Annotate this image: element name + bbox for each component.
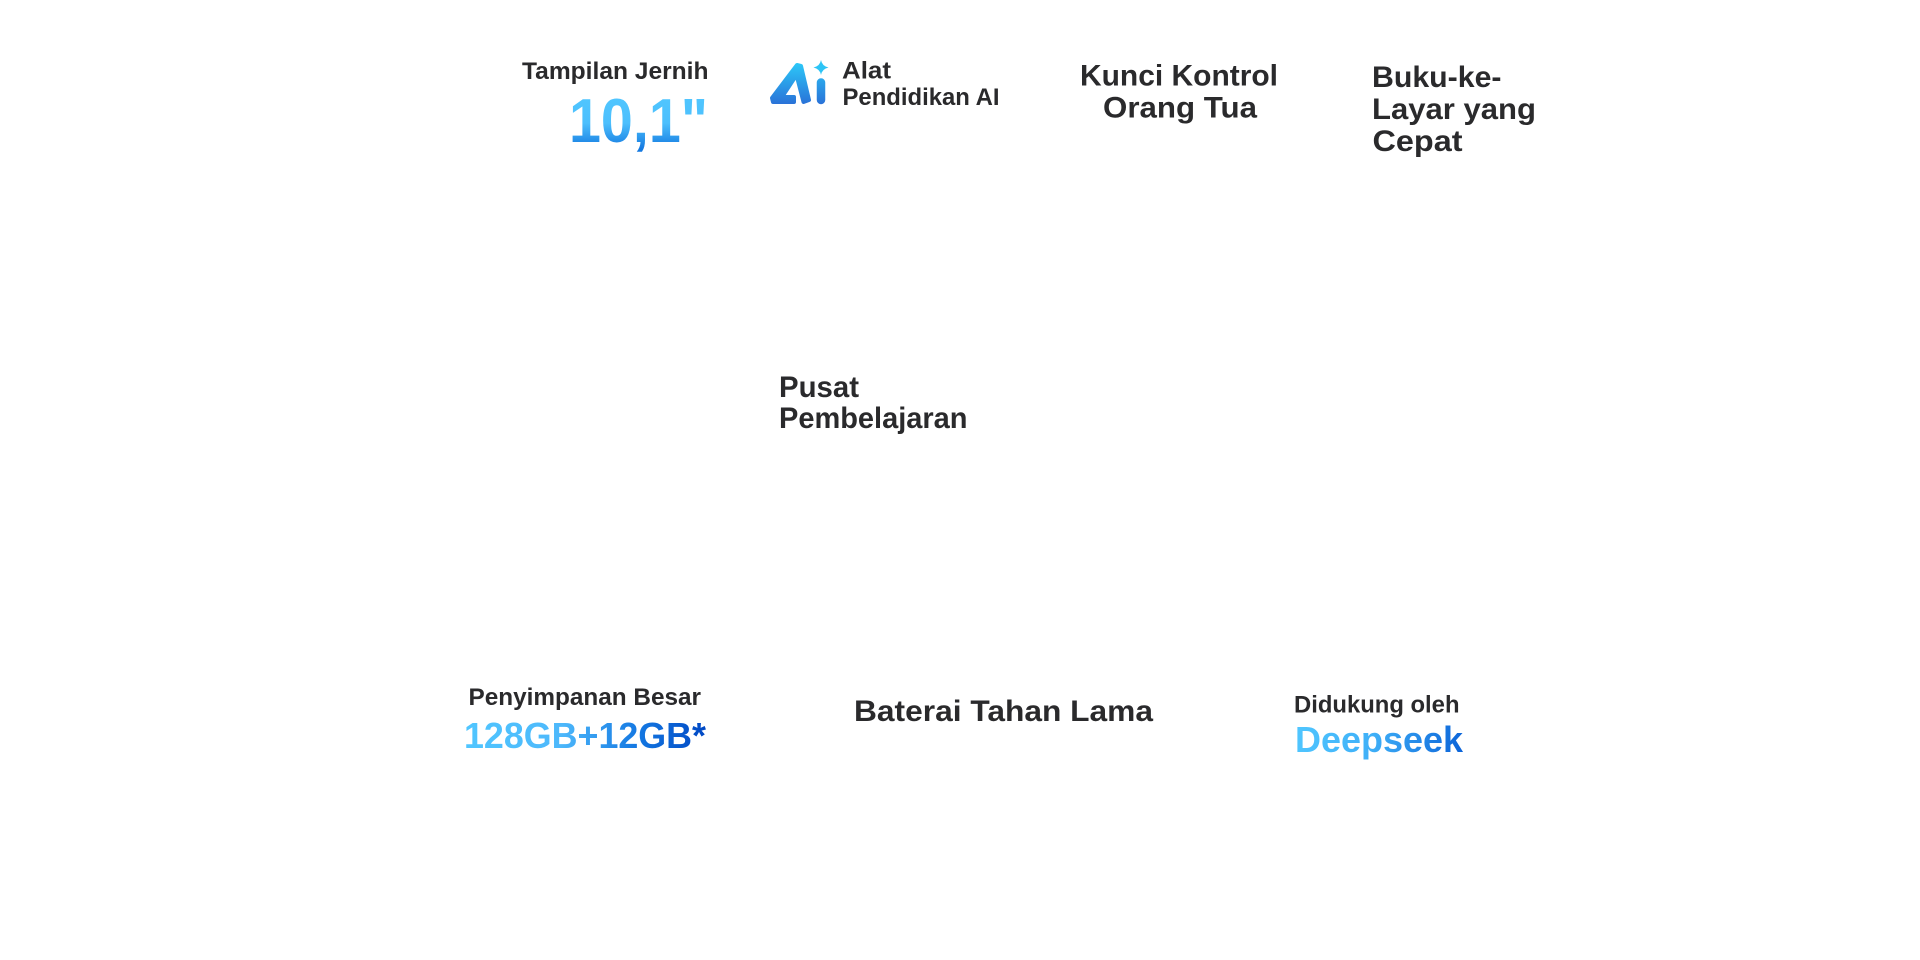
text: Alat Pendidikan AI: Pendidikan AI — [842, 84, 1000, 111]
feature: book to screen — [1372, 61, 1536, 158]
value: 10,1 inch: 10,1" — [569, 87, 708, 156]
feature: parental control: Kunci Kontrol — [1080, 60, 1278, 92]
text: Alat Pendidikan AI: Alat — [842, 58, 891, 84]
label: Penyimpanan Besar: Penyimpanan Besar — [468, 684, 701, 711]
feature: learning center — [779, 371, 968, 435]
text: Alat Pendidikan AI — [842, 58, 1000, 111]
feature: learning center: Pusat — [779, 371, 859, 404]
feature: learning center: Pembelajaran — [779, 402, 968, 435]
feature: powered by Deepseek — [1294, 692, 1464, 760]
feature: large storage — [464, 684, 706, 756]
label: Didukung oleh: Didukung oleh — [1294, 692, 1460, 718]
value: 128GB+12GB: 128GB+12GB* — [464, 715, 706, 756]
feature: parental control: Orang Tua — [1103, 92, 1257, 124]
feature: clear display — [522, 58, 708, 156]
value: Deepseek: Deepseek — [1295, 719, 1464, 760]
feature: book to screen: Cepat — [1372, 125, 1462, 158]
label: Tampilan Jernih: Tampilan Jernih — [522, 58, 708, 85]
feature: parental control — [1080, 60, 1278, 124]
feature: book to screen: Layar yang — [1372, 93, 1536, 126]
icon: AI logo with sparkle — [772, 60, 828, 102]
feature: long battery: Baterai Tahan Lama — [854, 695, 1153, 728]
feature: AI education tools — [772, 58, 1000, 111]
feature: book to screen: Buku-ke- — [1372, 61, 1502, 94]
